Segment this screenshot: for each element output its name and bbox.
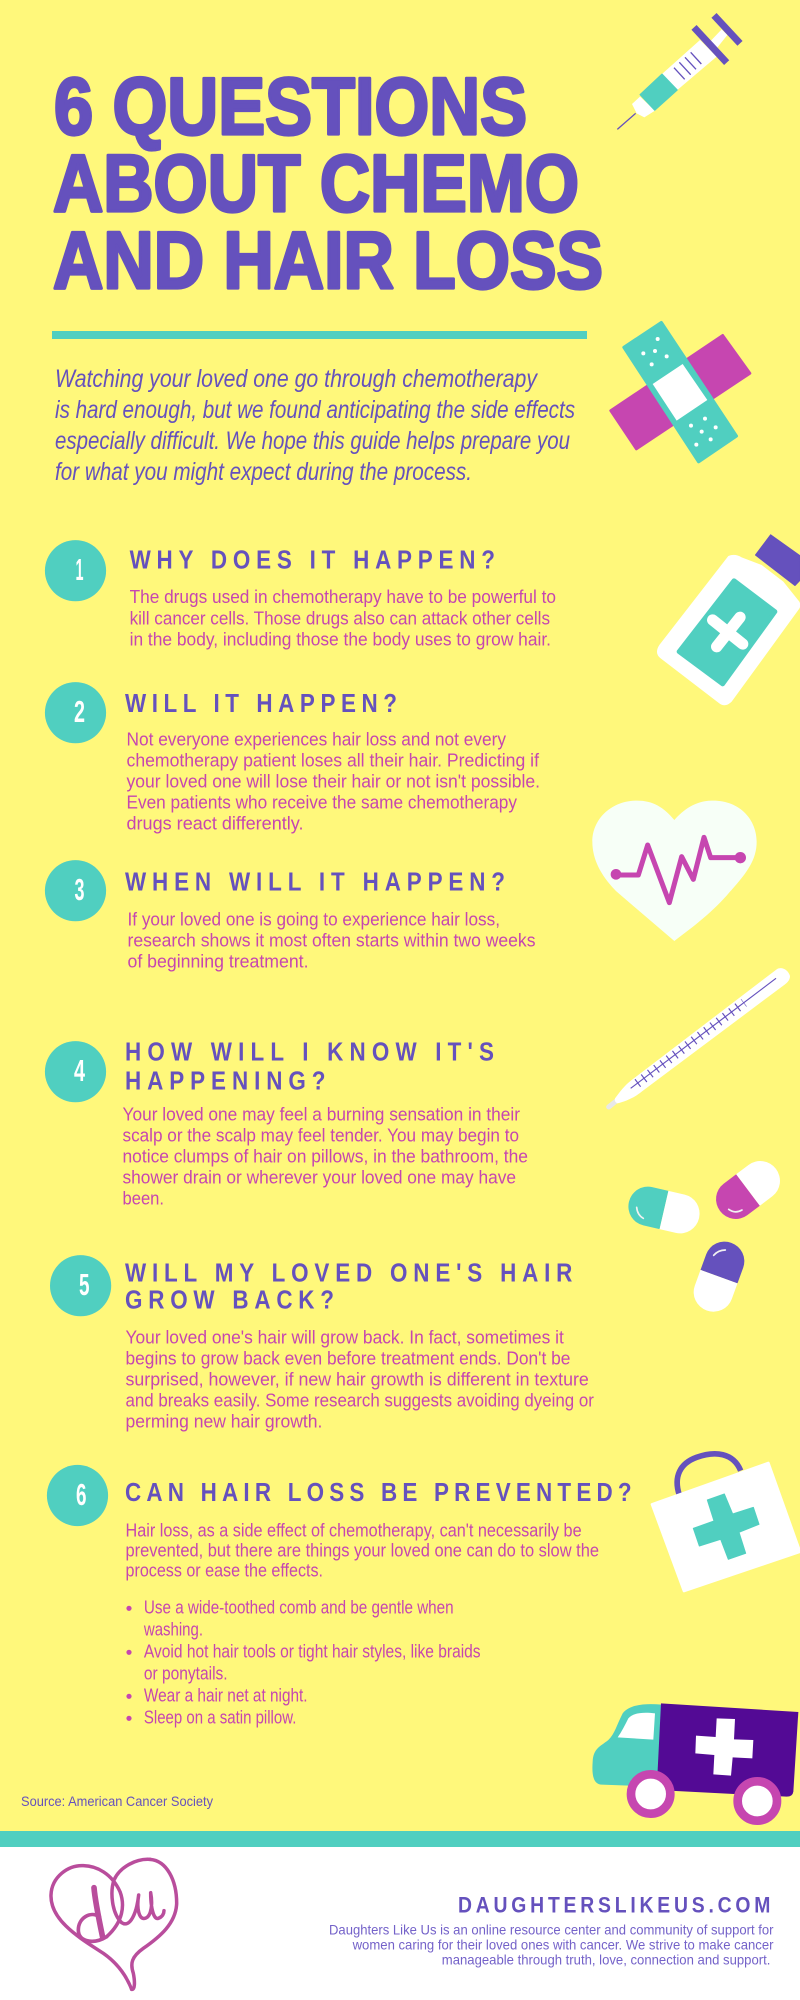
body text 3: of beginning treatment. — [128, 950, 308, 971]
bullet list: Sleep on a satin pillow. — [144, 1706, 296, 1727]
heading 3: WHEN WILL IT HAPPEN? — [125, 868, 505, 897]
panel: question 3 — [45, 860, 536, 971]
bullet list: Use a wide-toothed comb and be gentle when — [144, 1596, 454, 1617]
body text 4: shower drain or wherever your loved one may have — [122, 1166, 516, 1187]
body text 2: drugs react differently. — [126, 812, 304, 833]
panel: question 2 — [45, 682, 540, 833]
number badge 5: 5 — [79, 1267, 90, 1302]
title rule — [52, 331, 587, 339]
body text 4: Your loved one may feel a burning sensation in their — [122, 1103, 520, 1124]
body text 4: notice clumps of hair on pillows, in the bathroom, the — [122, 1145, 528, 1166]
body text 4 — [122, 1103, 528, 1208]
icon: medicine bottle — [657, 535, 800, 705]
footer description: women caring for their loved ones with cancer. We strive to make cancer — [352, 1936, 774, 1952]
number badge 6 — [47, 1465, 108, 1526]
body text 1: kill cancer cells. Those drugs also can attack other cells — [130, 607, 550, 628]
number badge 3 — [45, 860, 106, 921]
heading 4: HOW WILL I KNOW IT'S — [125, 1038, 494, 1067]
title: ABOUT CHEMO — [53, 139, 579, 229]
body text 2: Even patients who receive the same chemotherapy — [126, 791, 518, 812]
bullet list: or ponytails. — [144, 1662, 228, 1683]
heading 1: WHY DOES IT HAPPEN? — [130, 546, 495, 575]
intro text: Watching your loved one go through chemotherapy — [55, 365, 538, 393]
panel: question 1 — [45, 540, 556, 649]
bullet list: Avoid hot hair tools or tight hair styles, like braids — [144, 1640, 481, 1661]
number badge 4: 4 — [74, 1053, 85, 1088]
body text 1: in the body, including those the body uses to grow hair. — [130, 628, 551, 649]
icon: bandage — [611, 323, 750, 462]
title: AND HAIR LOSS — [53, 216, 603, 306]
title — [53, 62, 603, 306]
logo: dlu heart — [51, 1859, 177, 1989]
heading 5 — [125, 1259, 572, 1315]
intro text: especially difficult. We hope this guide helps prepare you — [55, 427, 570, 455]
footer band — [0, 1831, 800, 1847]
body text 3: If your loved one is going to experience hair loss, — [128, 908, 500, 929]
body text 5: begins to grow back even before treatment ends. Don't be — [126, 1347, 570, 1368]
body text 2: chemotherapy patient loses all their hair. Predicting if — [126, 749, 540, 770]
body text 6: Hair loss, as a side effect of chemotherapy, can't necessarily be — [126, 1520, 582, 1541]
source note: Source: American Cancer Society — [21, 1793, 213, 1809]
body text 5: surprised, however, if new hair growth is different in texture — [126, 1368, 589, 1389]
icon: syringe — [617, 15, 740, 129]
heading 5: GROW BACK? — [125, 1286, 334, 1315]
title: 6 QUESTIONS — [54, 62, 527, 152]
body text 1: The drugs used in chemotherapy have to be powerful to — [130, 586, 556, 607]
footer panel — [0, 1847, 800, 2000]
panel: question 6 — [47, 1465, 632, 1727]
icon: thermometer — [609, 968, 790, 1107]
panel: question 5 — [50, 1255, 594, 1431]
icon: ambulance — [592, 1703, 798, 1821]
number badge 2 — [45, 682, 106, 743]
heading 4 — [125, 1038, 494, 1096]
number badge 2: 2 — [74, 694, 85, 729]
bullet list — [126, 1596, 481, 1727]
footer description: manageable through truth, love, connection and support. — [442, 1951, 770, 1967]
bullet list: Wear a hair net at night. — [144, 1684, 308, 1705]
body text 2 — [126, 728, 540, 833]
bullet list: washing. — [143, 1618, 203, 1639]
number badge 6: 6 — [76, 1477, 86, 1512]
number badge 5 — [50, 1255, 111, 1316]
number badge 3: 3 — [74, 872, 84, 907]
intro text — [55, 365, 575, 486]
body text 3 — [128, 908, 536, 971]
body text 4: been. — [122, 1187, 164, 1208]
intro text: for what you might expect during the process. — [55, 458, 472, 486]
number badge 1: 1 — [76, 552, 84, 587]
number badge 4 — [45, 1041, 106, 1102]
footer description — [329, 1921, 774, 1967]
icon: pills — [624, 1153, 788, 1317]
body text 5: perming new hair growth. — [126, 1410, 322, 1431]
body text 1 — [130, 586, 556, 649]
body text 2: your loved one will lose their hair or not isn't possible. — [126, 770, 540, 791]
panel: question 4 — [45, 1038, 528, 1208]
icon: first aid kit — [652, 1454, 800, 1591]
footer description: Daughters Like Us is an online resource center and community of support for — [329, 1921, 774, 1937]
body text 5: and breaks easily. Some research suggests avoiding dyeing or — [126, 1389, 594, 1410]
heading 5: WILL MY LOVED ONE'S HAIR — [125, 1259, 572, 1288]
body text 3: research shows it most often starts within two weeks — [128, 929, 536, 950]
body text 6 — [126, 1520, 599, 1581]
body text 6: prevented, but there are things your loved one can do to slow the — [126, 1540, 599, 1561]
body text 5: Your loved one's hair will grow back. In fact, sometimes it — [126, 1326, 564, 1347]
intro text: is hard enough, but we found anticipating the side effects — [55, 396, 575, 424]
body text 6: process or ease the effects. — [126, 1560, 323, 1581]
icon: heart with pulse — [592, 801, 757, 941]
number badge 1 — [45, 540, 106, 601]
body text 5 — [126, 1326, 594, 1431]
heading 2: WILL IT HAPPEN? — [125, 690, 397, 718]
heading 4: HAPPENING? — [125, 1067, 325, 1096]
heading 6: CAN HAIR LOSS BE PREVENTED? — [125, 1479, 632, 1507]
footer website heading: DAUGHTERSLIKEUS.COM — [458, 1894, 770, 1918]
body text 2: Not everyone experiences hair loss and not every — [126, 728, 507, 749]
body text 4: scalp or the scalp may feel tender. You may begin to — [122, 1124, 519, 1145]
